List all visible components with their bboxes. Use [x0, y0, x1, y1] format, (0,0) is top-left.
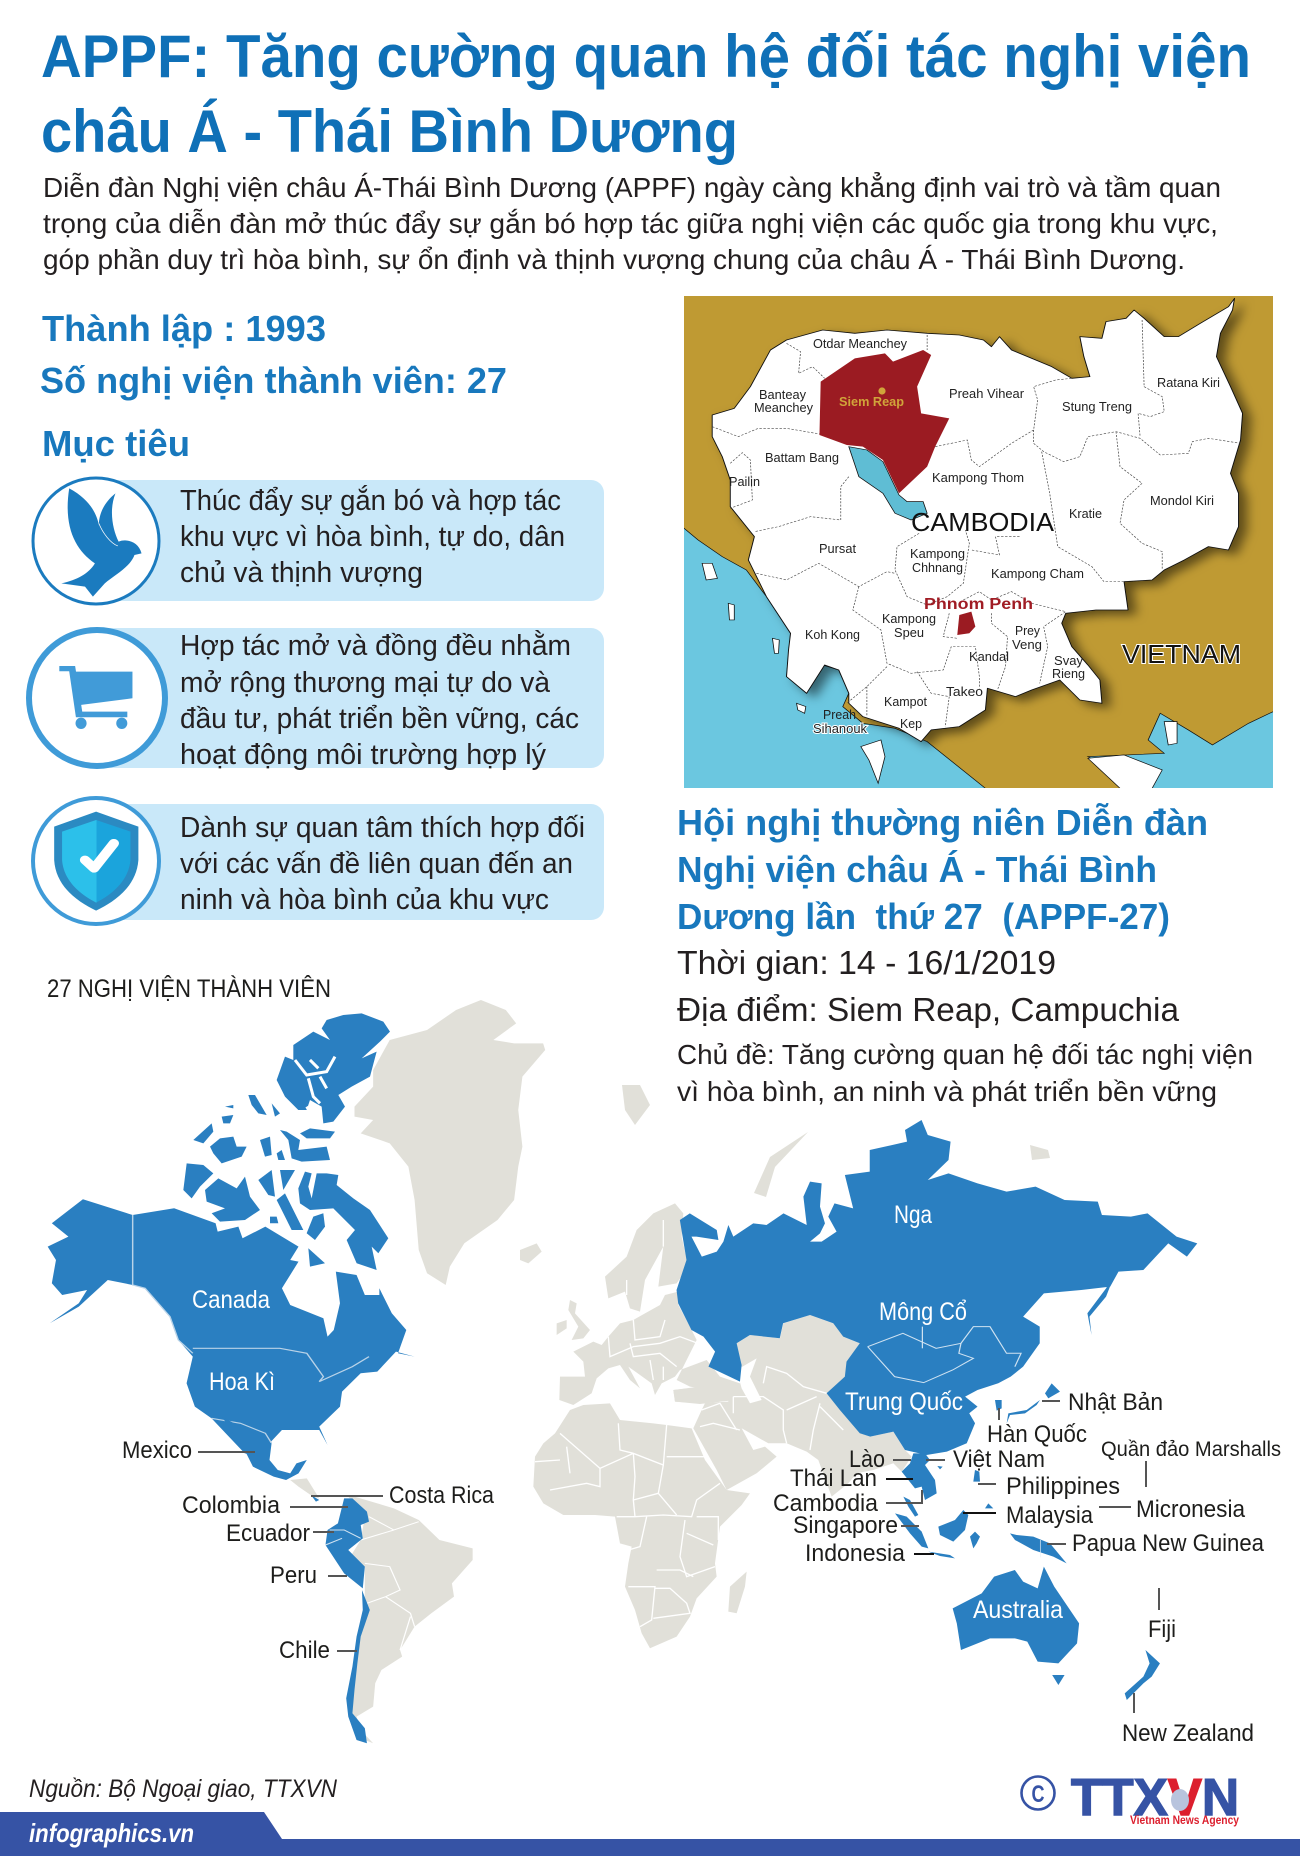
map labels: Nhật Bản	[1068, 1389, 1163, 1416]
Cambodia labels: Kampong	[910, 546, 965, 561]
land: Oceania members	[953, 1567, 1160, 1700]
heading: objectives: Mục tiêu	[42, 423, 190, 464]
text: objective 2: Hợp tác mở và đồng đều nhằm	[180, 629, 571, 662]
map labels	[122, 1201, 1281, 1747]
conference heading: Dương lần thứ 27 (APPF-27)	[677, 896, 1170, 937]
Cambodia labels: Kampong	[882, 611, 936, 626]
Cambodia labels: Preah Vihear	[949, 386, 1025, 401]
map labels: New Zealand	[1122, 1720, 1254, 1747]
text: objective 3: Dành sự quan tâm thích hợp đối	[180, 812, 585, 844]
Central America	[290, 1478, 319, 1498]
Arctic islands	[183, 1013, 390, 1270]
Cambodia labels: Kampot	[884, 694, 927, 709]
map labels: Thái Lan	[790, 1465, 877, 1492]
text: objective 1: chủ và thịnh vượng	[180, 557, 423, 589]
text: objective 3: ninh và hòa bình của khu vực	[180, 884, 549, 916]
Cambodia labels: Stung Treng	[1062, 399, 1132, 414]
conference details: vì hòa bình, an ninh và phát triển bền vững	[677, 1076, 1217, 1107]
panel: objective 1	[33, 478, 604, 604]
Cambodia labels: Otdar Meanchey	[813, 336, 907, 351]
conference heading	[677, 802, 1208, 937]
map labels: Ecuador	[226, 1520, 310, 1547]
islands	[702, 563, 1177, 788]
text: objective 3: với các vấn đề liên quan đến an	[180, 848, 573, 880]
map labels: Trung Quốc	[845, 1388, 963, 1416]
map labels: Colombia	[182, 1492, 281, 1519]
text: objective 1: khu vực vì hòa bình, tự do, dân	[180, 521, 565, 553]
Cambodia labels: Svay	[1054, 653, 1083, 668]
text: objective 1: Thúc đẩy sự gắn bó và hợp tác	[180, 484, 561, 517]
text: objective 2: mở rộng thương mại tự do và	[180, 667, 551, 699]
map labels: Peru	[270, 1562, 317, 1589]
Cambodia labels: Chhnang	[912, 560, 963, 575]
intro text	[43, 171, 1221, 275]
map labels: Chile	[279, 1637, 330, 1664]
Cambodia labels: Veng	[1012, 637, 1042, 652]
Africa	[533, 1403, 750, 1648]
province borders	[712, 320, 1241, 727]
map caption: 27 NGHỊ VIỆN THÀNH VIÊN	[47, 974, 331, 1003]
Cambodia labels: Preah	[823, 707, 856, 722]
Cambodia labels: Speu	[894, 625, 924, 640]
map: Cambodia	[682, 296, 1277, 790]
Cambodia labels: Pailin	[729, 474, 760, 489]
map labels: Nga	[894, 1201, 932, 1229]
map labels: Quần đảo Marshalls	[1101, 1438, 1281, 1461]
lake	[849, 447, 927, 520]
Cambodia labels: Meanchey	[754, 400, 813, 415]
map labels: Australia	[973, 1596, 1063, 1624]
title	[41, 23, 1251, 165]
land: Latin America members	[222, 1417, 370, 1743]
conference heading: Hội nghị thường niên Diễn đàn	[677, 802, 1208, 843]
map labels: Lào	[849, 1446, 885, 1473]
map labels: Philippines	[1006, 1473, 1120, 1500]
conference heading: Nghị viện châu Á - Thái Bình	[677, 849, 1157, 890]
conference details: Thời gian: 14 - 16/1/2019	[677, 944, 1056, 981]
land: North America members	[48, 1013, 415, 1460]
map labels: Indonesia	[805, 1540, 906, 1567]
Siem Reap dot	[878, 387, 886, 395]
map labels: Fiji	[1148, 1616, 1176, 1643]
Cambodia labels: Ratana Kiri	[1157, 375, 1220, 390]
map labels: Micronesia	[1136, 1496, 1246, 1523]
map labels: Singapore	[793, 1512, 898, 1539]
logo: TTXVN: Vietnam News Agency	[1130, 1815, 1240, 1827]
founding facts	[40, 308, 507, 401]
Europe and western Asia	[520, 1203, 912, 1497]
Cambodia labels: Battam Bang	[765, 450, 839, 465]
Cambodia labels: VIETNAM	[1122, 639, 1241, 669]
Cambodia labels: CAMBODIA	[911, 507, 1055, 537]
map labels: Cambodia	[773, 1490, 879, 1517]
Cambodia labels: Rieng	[1052, 666, 1085, 681]
conference details	[677, 944, 1253, 1107]
map labels: Hoa Kì	[209, 1368, 275, 1396]
map labels: Costa Rica	[389, 1482, 495, 1509]
map labels: Mông Cổ	[879, 1298, 967, 1326]
Cambodia labels: Pursat	[819, 541, 856, 556]
sea	[682, 527, 1277, 790]
South America	[348, 1497, 473, 1743]
Cambodia labels: Kampong Thom	[932, 470, 1024, 485]
map leader lines	[198, 1401, 1159, 1713]
text: objective 3	[180, 812, 585, 916]
title: APPF: Tăng cường quan hệ đối tác nghị viện	[41, 23, 1251, 90]
Cambodia labels: Kandal	[969, 649, 1009, 664]
icon: shopping cart	[29, 630, 165, 766]
intro text: góp phần duy trì hòa bình, sự ổn định và thịnh vượng chung của châu Á - Thái Bình Dương.	[43, 244, 1185, 275]
Siem Reap province	[819, 350, 949, 493]
Cambodia labels: Phnom Penh	[924, 596, 1033, 613]
intro text: Diễn đàn Nghị viện châu Á-Thái Bình Dương (APPF) ngày càng khẳng định vai trò và tầm quan	[43, 171, 1221, 203]
Phnom Penh area	[957, 612, 975, 635]
logo: TTXVN: TTXVN	[1071, 1769, 1239, 1827]
map labels: Papua New Guinea	[1072, 1530, 1265, 1557]
source: Nguồn: Bộ Ngoại giao, TTXVN	[29, 1775, 338, 1803]
panel: objective 2	[29, 628, 604, 771]
Cambodia labels: Takeo	[946, 684, 983, 699]
map labels: Việt Nam	[953, 1446, 1045, 1473]
conference details: Chủ đề: Tăng cường quan hệ đối tác nghị viện	[677, 1039, 1253, 1070]
panel: objective 3	[33, 798, 604, 924]
icon: dove	[33, 478, 159, 604]
Cambodia labels: Banteay	[759, 387, 806, 402]
footer site name: infographics.vn	[29, 1818, 194, 1848]
Cambodia land	[712, 298, 1243, 742]
text: objective 1	[180, 484, 565, 589]
text: objective 2	[180, 629, 579, 771]
map labels: Canada	[192, 1286, 270, 1314]
Cambodia labels: Sihanouk	[813, 721, 867, 736]
icon: shield	[33, 798, 159, 924]
Greenland	[354, 1000, 545, 1285]
Cambodia labels: Mondol Kiri	[1150, 493, 1214, 508]
world map	[48, 1000, 1197, 1743]
Cambodia labels: Prey	[1015, 623, 1040, 638]
map labels: Hàn Quốc	[987, 1421, 1087, 1448]
founding facts: Số nghị viện thành viên: 27	[40, 360, 507, 401]
founding facts: Thành lập : 1993	[42, 308, 326, 349]
Cambodia labels: Kratie	[1069, 506, 1102, 521]
intro text: trọng của diễn đàn mở thúc đẩy sự gắn bó hợp tác giữa nghị viện các quốc gia trong khu vực,	[43, 208, 1218, 239]
logo: TTXVN: C	[1032, 1781, 1044, 1808]
title: châu Á - Thái Bình Dương	[41, 98, 738, 165]
land: non-member countries	[290, 1000, 1050, 1743]
map labels: Malaysia	[1006, 1502, 1094, 1529]
Cambodia labels	[729, 336, 1241, 736]
land: Southeast Asia members	[895, 1383, 1067, 1563]
Cambodia labels: Kampong Cham	[991, 566, 1084, 581]
land: Russia, Mongolia and China	[677, 1120, 1197, 1455]
text: objective 2: hoạt động môi trường hợp lý	[180, 739, 546, 771]
footer bar	[0, 1812, 1300, 1856]
map labels: Mexico	[122, 1437, 192, 1464]
conference details: Địa điểm: Siem Reap, Campuchia	[677, 991, 1180, 1028]
Cambodia labels: Siem Reap	[839, 394, 904, 409]
Cambodia labels: Kep	[900, 716, 922, 731]
Cambodia labels: Koh Kong	[805, 627, 860, 642]
text: objective 2: đầu tư, phát triển bền vững, các	[180, 703, 579, 735]
